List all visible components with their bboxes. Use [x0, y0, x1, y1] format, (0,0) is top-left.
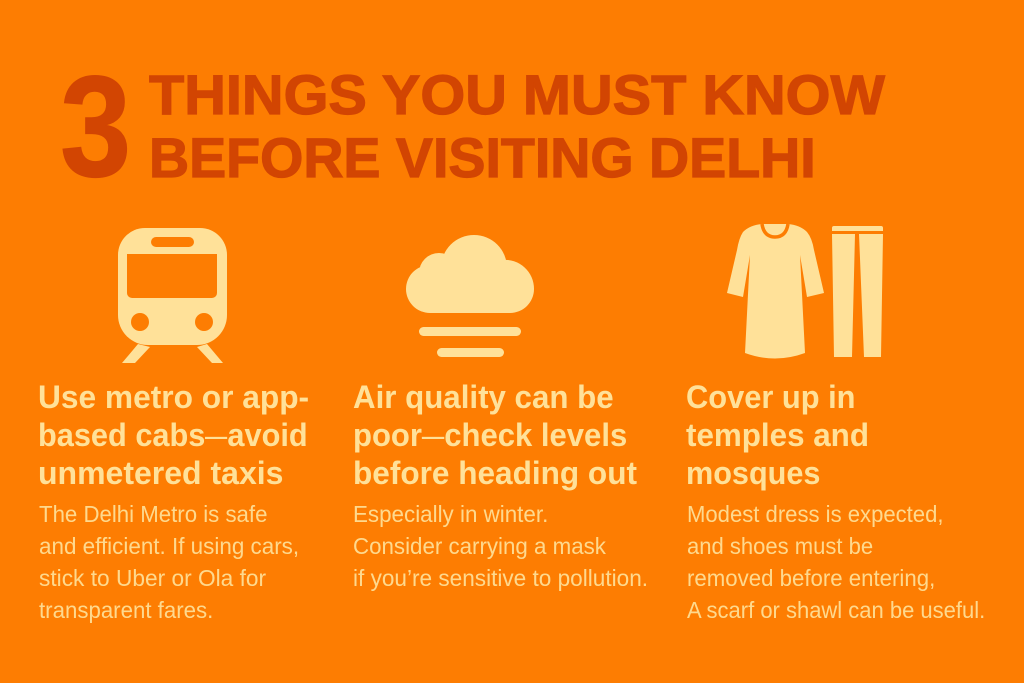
heading: air quality [353, 379, 637, 491]
text: cover up [687, 501, 985, 623]
title [60, 46, 886, 207]
heading: metro: unmetered taxis [38, 455, 283, 491]
heading: air quality: Air quality can be [353, 379, 614, 415]
text: metro: transparent fares. [39, 597, 213, 623]
text: metro: stick to Uber or Ola for [39, 565, 266, 591]
heading: metro [38, 379, 309, 491]
title text: THINGS YOU MUST KNOW [149, 63, 885, 126]
heading: cover up [686, 379, 869, 491]
text: cover up: Modest dress is expected, [687, 501, 944, 527]
heading: cover up: mosques [686, 455, 820, 491]
icon: smog cloud [406, 235, 534, 357]
heading: air quality: before heading out [353, 455, 637, 491]
title text: BEFORE VISITING DELHI [149, 126, 816, 189]
kurta [727, 224, 824, 358]
text: cover up: and shoes must be [687, 533, 873, 559]
heading: metro: — [205, 417, 227, 453]
text: cover up: A scarf or shawl can be useful. [687, 597, 985, 623]
heading: metro: based cabs avoid [38, 417, 308, 453]
heading: cover up: Cover up in [686, 379, 856, 415]
trousers [832, 226, 883, 357]
text: air quality [353, 501, 648, 591]
heading: metro: Use metro or app- [38, 379, 309, 415]
title text [149, 63, 886, 189]
text: metro: The Delhi Metro is safe [39, 501, 267, 527]
icon: train [118, 228, 227, 363]
heading: air quality: poor check levels [353, 417, 627, 453]
heading: air quality: — [422, 417, 444, 453]
text: air quality: Consider carrying a mask [353, 533, 606, 559]
text: air quality: Especially in winter. [353, 501, 548, 527]
text: metro [39, 501, 299, 623]
heading: cover up: temples and [686, 417, 869, 453]
text: air quality: if you’re sensitive to pollution. [353, 565, 648, 591]
text: cover up: removed before entering, [687, 565, 935, 591]
numeral 3: 3 [60, 46, 131, 207]
icon: modest clothing [727, 224, 883, 358]
text: metro: and efficient. If using cars, [39, 533, 299, 559]
